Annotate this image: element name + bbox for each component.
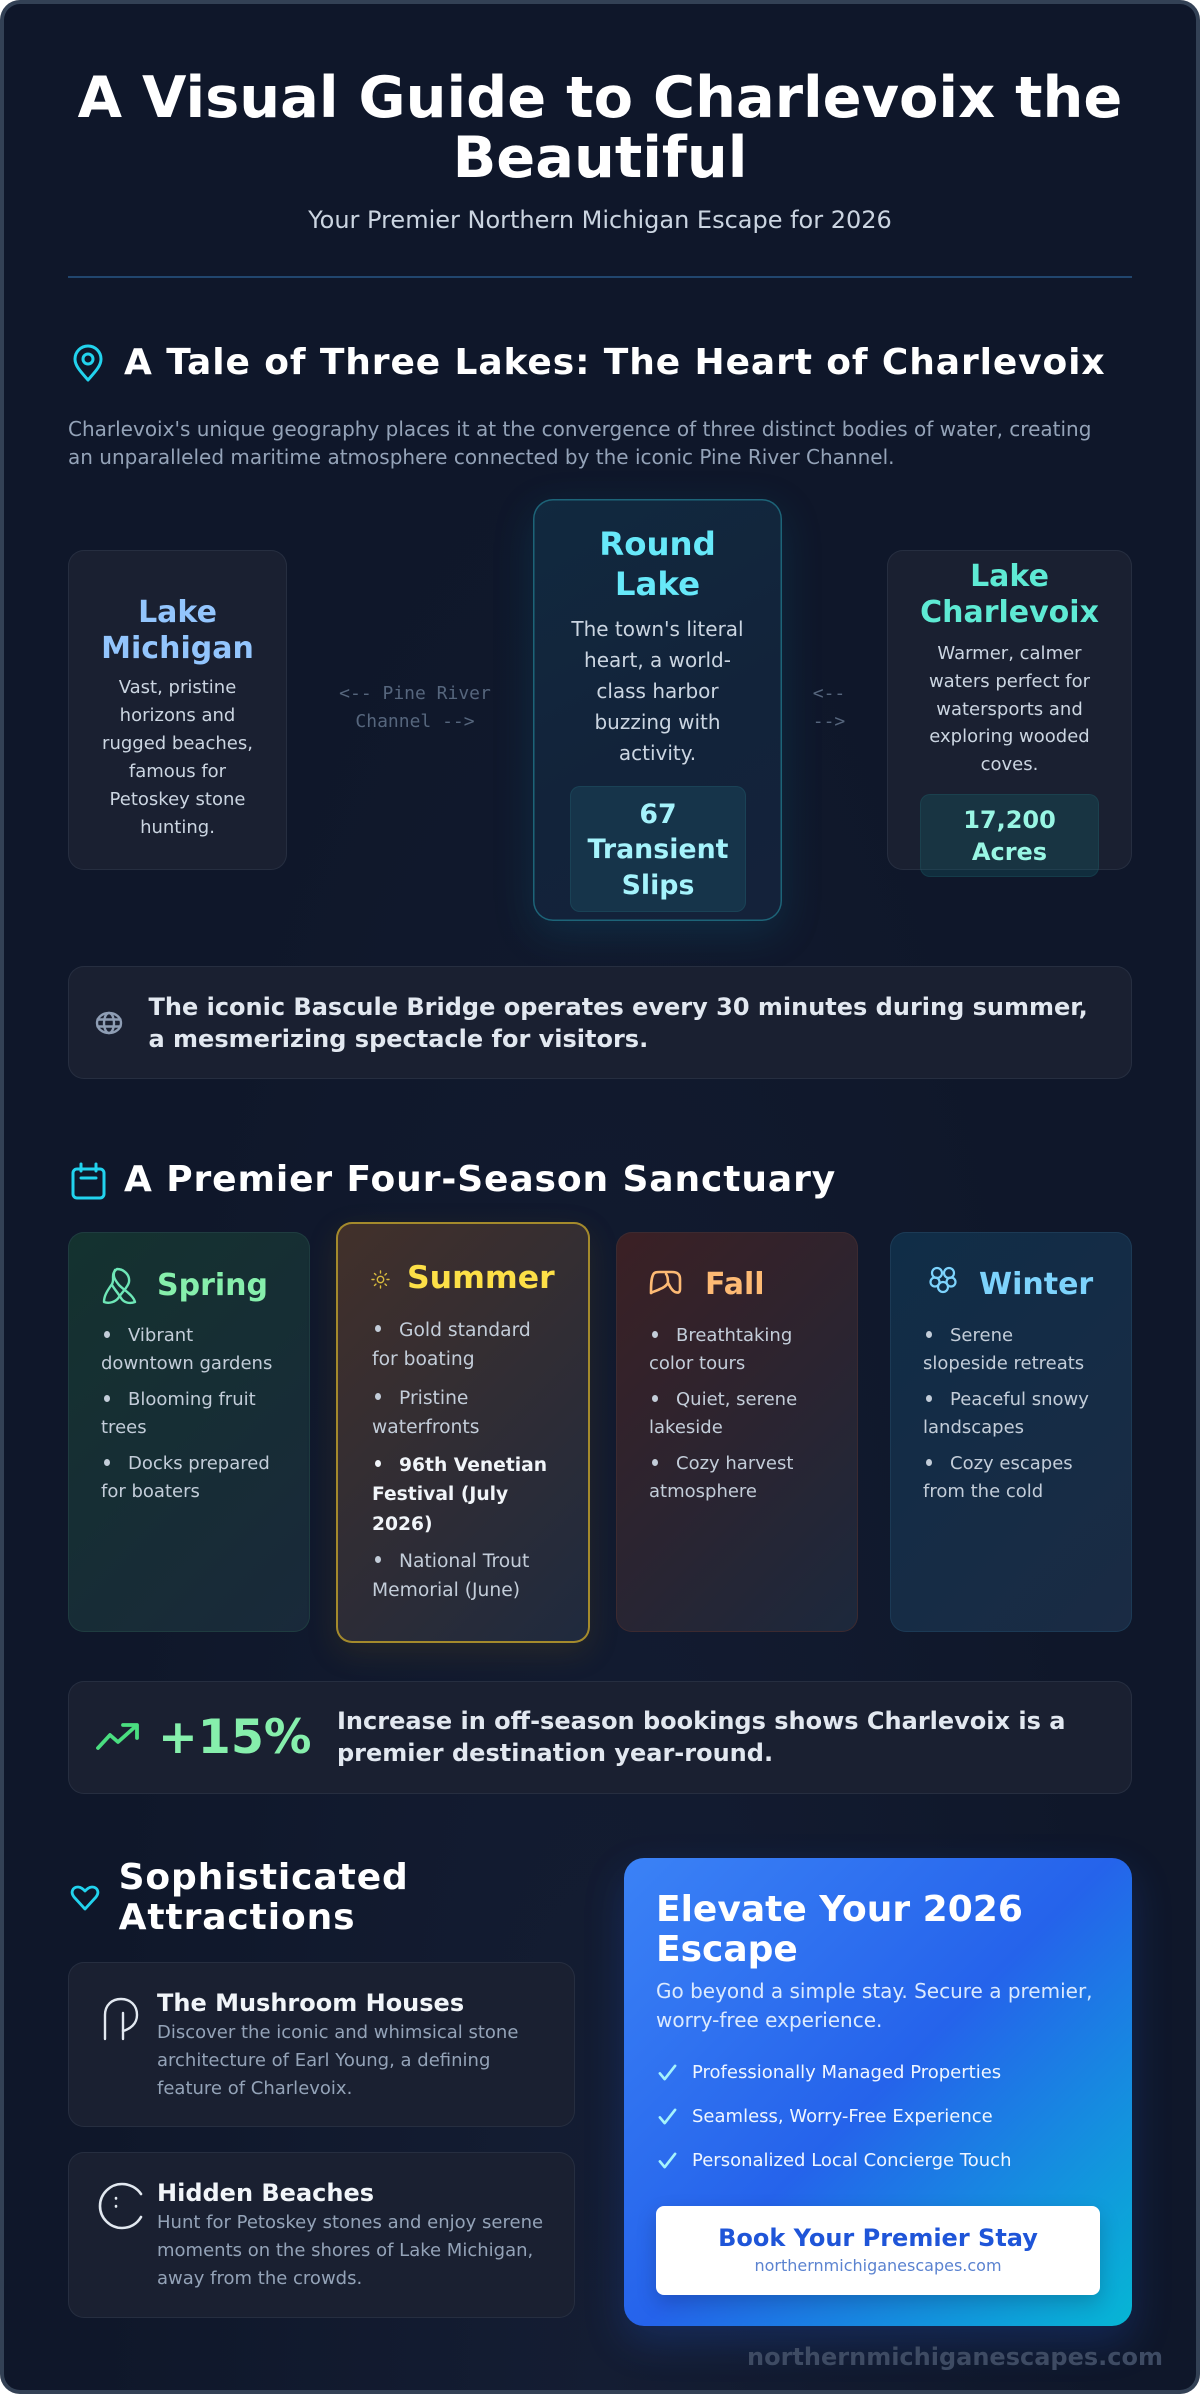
bullet: Cozy harvest: [676, 1452, 793, 1474]
heading text: A Premier Four-Season Sanctuary: [124, 1159, 836, 1200]
lake name: Lake: [138, 594, 217, 630]
stat text: [337, 1707, 1065, 1767]
lake description: famous for: [129, 761, 226, 782]
callout text: [148, 993, 1088, 1053]
lake description: Warmer, calmer: [937, 643, 1082, 664]
check item: [658, 2059, 1098, 2087]
title: Beautiful: [453, 124, 747, 190]
heading text: Sophisticated: [119, 1856, 409, 1898]
callout text: a mesmerizing spectacle for visitors.: [148, 1025, 648, 1053]
bullet: [101, 1388, 256, 1438]
bullet: Vibrant: [128, 1324, 193, 1346]
bullet: [372, 1320, 531, 1370]
panel: Lake Charlevoix: [887, 550, 1132, 870]
connector: Pine River Channel: [339, 683, 491, 732]
stat: transient slips: [570, 786, 746, 912]
panel: Fall: [616, 1232, 858, 1632]
bullet: Venetian Festival: Festival (July: [372, 1484, 508, 1505]
icon: calendar: [72, 1162, 106, 1200]
intro paragraph: [68, 416, 1091, 468]
bullet: lakeside: [649, 1416, 723, 1438]
bullet: Blooming fruit: [128, 1388, 256, 1410]
panel: off-season stat: [68, 1681, 1132, 1794]
icon: shell circle: [98, 2182, 144, 2230]
heading text: [119, 1858, 409, 1938]
callout: Bascule Bridge: [68, 966, 1132, 1079]
lake description: [102, 677, 253, 838]
bullet: Pristine: [399, 1388, 468, 1408]
lake description: horizons and: [120, 705, 235, 726]
bullet: Gold standard: [399, 1320, 531, 1340]
stat text: Transient: [588, 834, 728, 865]
lake name: [599, 525, 716, 603]
season title: Winter: [979, 1267, 1093, 1302]
lake description: waters perfect for: [929, 671, 1090, 692]
panel: Summer: [336, 1222, 590, 1643]
panel: Spring: [68, 1232, 310, 1632]
check item: [658, 2147, 1098, 2175]
icon: check: [658, 2107, 677, 2126]
icon: map pin: [74, 344, 102, 382]
divider: [68, 276, 1132, 278]
bullet: [372, 1388, 479, 1438]
CTA text: worry-free experience.: [656, 2008, 882, 2032]
stat text: 67: [639, 798, 677, 830]
stat text: [963, 806, 1056, 866]
attraction text: moments on the shores of Lake Michigan,: [157, 2240, 533, 2261]
bullet: for boaters: [101, 1480, 200, 1502]
lake description: hunting.: [140, 817, 215, 838]
panel: Lake Michigan: [68, 550, 287, 870]
lake name: Michigan: [101, 630, 254, 666]
title: [78, 64, 1122, 190]
item text: Seamless, Worry-Free Experience: [692, 2106, 993, 2127]
panel: call to action: [624, 1858, 1132, 2326]
bullet: Venetian Festival: 2026): [372, 1514, 433, 1534]
bullet: [649, 1324, 792, 1374]
attraction text: away from the crowds.: [157, 2268, 362, 2289]
bullet: landscapes: [923, 1416, 1024, 1438]
bullet: Memorial (June): [372, 1580, 520, 1601]
season title: Summer: [407, 1260, 555, 1296]
lake name: Lake: [970, 559, 1049, 594]
watermark: northernmichiganescapes.com: [747, 2343, 1163, 2371]
heading: attractions: [70, 1856, 409, 1938]
bullet: [649, 1452, 793, 1502]
stat text: Acres: [972, 838, 1047, 866]
lake description: Vast, pristine: [119, 677, 236, 698]
stat text: Slips: [622, 870, 694, 901]
icon: sprout: [102, 1268, 136, 1304]
lake description: rugged beaches,: [102, 733, 253, 754]
bullet: Quiet, serene: [676, 1388, 797, 1410]
icon: check: [658, 2151, 677, 2170]
lake description: coves.: [981, 754, 1038, 775]
stat text: premier destination year-round.: [337, 1739, 773, 1767]
CTA heading: Escape: [656, 1928, 798, 1970]
bullet: Cozy escapes: [950, 1452, 1073, 1474]
bullet: [101, 1452, 270, 1502]
bullet: [923, 1452, 1073, 1502]
stat value: +15%: [158, 1710, 312, 1765]
attraction text: feature of Charlevoix.: [157, 2078, 352, 2099]
lake name: Charlevoix: [920, 595, 1099, 630]
bullet: Docks prepared: [128, 1452, 270, 1474]
subtitle: Your Premier Northern Michigan Escape for 2026: [308, 206, 892, 234]
checklist: [658, 2059, 1098, 2175]
header: title block: [78, 64, 1122, 234]
CTA heading: Elevate Your 2026: [656, 1888, 1023, 1930]
icon: leaf book: [650, 1270, 682, 1294]
heading: four seasons: [72, 1159, 836, 1200]
item text: Professionally Managed Properties: [692, 2062, 1001, 2083]
bullet: [923, 1388, 1089, 1438]
lake description: heart, a world-: [584, 648, 731, 672]
lake description: activity.: [619, 741, 696, 765]
stat text: 17,200: [963, 806, 1056, 834]
season title: Spring: [157, 1268, 268, 1303]
connector: second channel arrows: -->: [813, 711, 845, 732]
check item: [658, 2103, 1098, 2131]
stat: acres: [920, 794, 1099, 877]
icon: trending up: [96, 1723, 139, 1750]
lake name: [101, 594, 254, 666]
panel: Winter: [890, 1232, 1132, 1632]
lake description: [571, 616, 744, 765]
connector: Pine River Channel: <-- Pine River: [339, 683, 491, 704]
heading text: A Tale of Three Lakes: The Heart of Charlevoix: [124, 342, 1106, 382]
connector: second channel arrows: <--: [813, 683, 845, 704]
bullet: Venetian Festival: [372, 1454, 547, 1534]
connector: second channel arrows: [813, 683, 845, 732]
CTA text: [656, 1977, 1093, 2034]
attraction text: Discover the iconic and whimsical stone: [157, 2022, 518, 2043]
bullet: atmosphere: [649, 1480, 757, 1502]
button label: Book Your Premier Stay: [718, 2224, 1038, 2252]
bullet: color tours: [649, 1352, 745, 1374]
attraction text: architecture of Earl Young, a defining: [157, 2050, 490, 2071]
lake description: class harbor: [596, 679, 719, 703]
bullet: from the cold: [923, 1480, 1043, 1502]
connector: Pine River Channel: Channel -->: [355, 711, 475, 732]
lake description: watersports and: [936, 699, 1083, 720]
title: A Visual Guide to Charlevoix the: [78, 64, 1122, 130]
button url: northernmichiganescapes.com: [754, 2256, 1002, 2274]
lake description: buzzing with: [594, 710, 721, 734]
attraction title: The Mushroom Houses: [157, 1989, 464, 2017]
bullet: for boating: [372, 1349, 475, 1370]
bullet: Breathtaking: [676, 1324, 792, 1346]
bullet: downtown gardens: [101, 1352, 272, 1374]
heading: three lakes: [74, 342, 1106, 382]
icon: mushroom arch: [102, 1996, 140, 2042]
heading text: Attractions: [119, 1896, 356, 1938]
icon: heart: [70, 1886, 100, 1910]
bullet: [923, 1324, 1084, 1374]
bullet: [649, 1388, 797, 1438]
bullet: Serene: [950, 1324, 1013, 1346]
bullet: [101, 1324, 272, 1374]
lake description: Petoskey stone: [110, 789, 245, 810]
CTA heading: [656, 1890, 1023, 1970]
bullet: Venetian Festival: 96th Venetian: [399, 1454, 547, 1476]
bullet: waterfronts: [372, 1417, 479, 1438]
stat text: [588, 798, 728, 901]
icon: snow cluster: [929, 1266, 957, 1294]
icon: globe: [96, 1012, 122, 1034]
bullet: Peaceful snowy: [950, 1388, 1089, 1410]
lake description: The town's literal: [571, 616, 744, 640]
CTA text: Go beyond a simple stay. Secure a premier,: [656, 1979, 1093, 2003]
season title: Fall: [705, 1267, 765, 1302]
attraction title: Hidden Beaches: [157, 2179, 374, 2207]
panel: Hidden Beaches: [68, 2152, 575, 2318]
lake description: [929, 643, 1090, 775]
intro paragraph: an unparalleled maritime atmosphere connected by the iconic Pine River Channel.: [68, 444, 895, 468]
lake description: exploring wooded: [929, 726, 1090, 747]
callout text: The iconic Bascule Bridge operates every 30 minutes during summer,: [148, 993, 1088, 1021]
lake name: Lake: [615, 565, 700, 603]
bullet: slopeside retreats: [923, 1352, 1084, 1374]
attraction text: [157, 2209, 543, 2293]
panel: Mushroom Houses: [68, 1962, 575, 2127]
attraction text: [157, 2019, 518, 2103]
item text: Personalized Local Concierge Touch: [692, 2150, 1012, 2171]
intro paragraph: Charlevoix's unique geography places it at the convergence of three distinct bodies of water, creating: [68, 416, 1091, 440]
bullet: trees: [101, 1416, 147, 1438]
lake name: Round: [599, 525, 716, 563]
panel: Round Lake: [533, 499, 782, 921]
attraction text: Hunt for Petoskey stones and enjoy serene: [157, 2212, 543, 2233]
icon: check: [658, 2063, 677, 2082]
button: [656, 2206, 1100, 2295]
stat text: Increase in off-season bookings shows Charlevoix is a: [337, 1707, 1065, 1735]
bullet: [372, 1550, 529, 1601]
icon: sun: [371, 1270, 390, 1289]
bullet: National Trout: [399, 1550, 529, 1572]
lake name: [920, 559, 1099, 630]
